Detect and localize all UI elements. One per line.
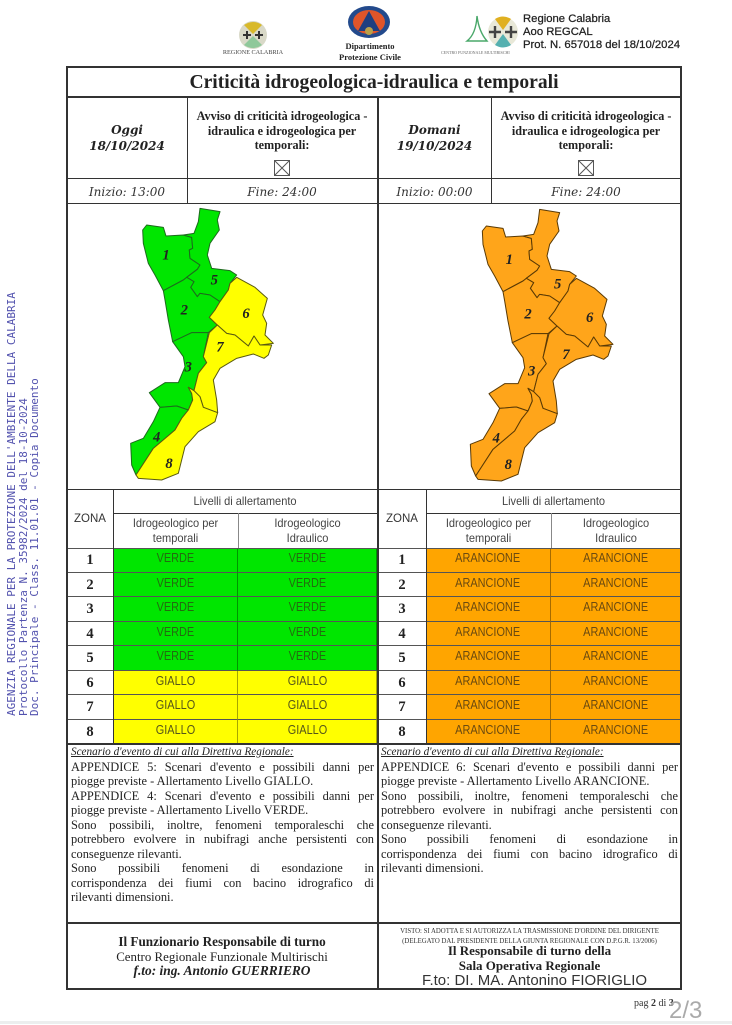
today date: 18/10/2024 — [89, 139, 165, 153]
tomorrow zone rows: ARANCIONE — [456, 673, 520, 688]
today zone rows: 7 — [86, 699, 94, 715]
column heading: temporali: temporali — [153, 530, 198, 544]
text block: tomorrow scenario: conseguenze rilevanti. — [381, 818, 492, 832]
map: tomorrow zones: 7 — [562, 347, 570, 363]
tomorrow zone rows: 7 — [398, 699, 406, 715]
protocol text — [522, 13, 680, 51]
column heading: temporali: Idrogeologico per — [133, 516, 218, 530]
today zone rows: 1 — [86, 552, 94, 568]
tomorrow zone rows: ARANCIONE — [456, 697, 520, 712]
zona heading: ZONA — [386, 512, 418, 524]
today zone rows: VERDE — [288, 599, 326, 614]
signature: operations room: (DELEGATO DAL PRESIDENTE DELLA GIUNTA REGIONALE CON D.P.G.R. 13/2006) — [402, 938, 657, 944]
map: today zones: 1 — [162, 247, 170, 263]
text block: today scenario: APPENDICE 5: Scenari d'evento e possibili danni per — [71, 760, 374, 774]
side stamp: vertical protocol text: AGENZIA REGIONALE PER LA PROTEZIONE DELL'AMBIENTE DELLA CALABRIA — [5, 292, 18, 716]
map: tomorrow zones: 3 — [527, 363, 535, 379]
text block: today scenario: corrispondenza dei fiumi con bacino idrografico di — [71, 876, 374, 890]
text block: today scenario: potrebbero evolvere in nubifragi anche persistenti con — [71, 832, 374, 846]
text block: tomorrow scenario: Scenario d'evento di cui alla Direttiva Regionale: — [381, 746, 604, 758]
signature: operations room — [400, 928, 659, 989]
today start time: Inizio: 13:00 — [89, 184, 165, 198]
column heading: idraulico: Idraulico — [287, 530, 328, 544]
tomorrow date — [397, 123, 472, 153]
column heading: idraulico: Idraulico — [595, 530, 637, 544]
today zone rows: VERDE — [288, 624, 326, 639]
tomorrow zone rows: ARANCIONE — [583, 648, 648, 663]
tomorrow zone rows — [379, 549, 680, 743]
tomorrow zone rows: ARANCIONE — [456, 575, 520, 590]
logo: ARPACAL: CENTRO FUNZIONALE MULTIRISCHI — [441, 50, 510, 55]
tomorrow zone rows: ARANCIONE — [583, 599, 648, 614]
main bulletin table — [66, 66, 682, 990]
header: logos and protocol — [223, 6, 680, 62]
tomorrow zone rows: ARANCIONE — [456, 648, 520, 663]
text block: tomorrow scenario: Sono possibili fenomeni di esondazione in — [381, 832, 678, 846]
today zone rows: VERDE — [156, 599, 194, 614]
column heading: temporali: temporali — [466, 530, 511, 544]
logo: Regione Calabria — [223, 21, 283, 56]
today zone rows: VERDE — [156, 575, 194, 590]
signature: operations room: F.to: DI. MA. Antonino FIORIGLIO — [422, 972, 647, 989]
today notice: idraulica e idrogeologica per — [208, 124, 356, 138]
page indicator overlay: 2/3 — [669, 997, 702, 1024]
tomorrow zone rows: ARANCIONE — [583, 673, 648, 688]
today zone rows: GIALLO — [287, 722, 327, 736]
panel: tomorrow header — [396, 109, 671, 198]
tomorrow zone rows: ARANCIONE — [583, 697, 648, 712]
column heading: temporali: Idrogeologico per — [446, 516, 531, 530]
tomorrow zone rows: ARANCIONE — [583, 624, 648, 639]
panel: today header — [88, 109, 367, 198]
text block: today scenario: conseguenze rilevanti. — [71, 847, 182, 861]
side stamp: vertical protocol text: Doc. Principale - Class. 11.01.01 - Copia Documento — [28, 378, 41, 716]
today zone rows: VERDE — [288, 648, 326, 663]
map: tomorrow zones: 6 — [586, 310, 594, 326]
tomorrow notice — [500, 109, 671, 152]
today zone rows: GIALLO — [155, 697, 195, 712]
tomorrow zone rows: ARANCIONE — [583, 722, 648, 736]
today zone rows: GIALLO — [287, 697, 327, 712]
text block: today scenario: rilevanti dimensioni. — [71, 890, 174, 904]
today zone rows: 8 — [86, 724, 94, 740]
map: today zones: 4 — [152, 429, 160, 445]
tomorrow zone rows: 1 — [398, 552, 406, 568]
text block: tomorrow scenario: piogge previste - Allertamento Livello ARANCIONE. — [381, 774, 649, 788]
text block: tomorrow scenario: potrebbero evolvere in nubifragi anche persistenti con — [381, 803, 678, 817]
tomorrow notice: idraulica e idrogeologica per — [512, 124, 660, 138]
side stamp: vertical protocol text: Protocollo Partenza N. 35982/2024 del 18-10-2024 — [17, 398, 30, 716]
map: tomorrow zones: 5 — [554, 277, 561, 293]
tomorrow zone rows: ARANCIONE — [456, 722, 520, 736]
signature: functionary — [116, 934, 328, 978]
column heading: idraulico — [274, 516, 341, 544]
tomorrow zone rows: ARANCIONE — [583, 575, 648, 590]
text block: tomorrow scenario: APPENDICE 6: Scenari d'evento e possibili danni per — [381, 760, 678, 774]
map: tomorrow zones: 2 — [523, 307, 532, 323]
today zone rows: 3 — [86, 601, 94, 617]
map: today zones: 7 — [216, 339, 224, 355]
text block: tomorrow scenario — [381, 746, 678, 875]
today zone rows — [68, 549, 377, 743]
text block: today scenario: Sono possibili, inoltre, fenomeni temporaleschi che — [71, 818, 374, 832]
tomorrow zone rows: ARANCIONE — [456, 550, 520, 565]
tomorrow zone rows: ARANCIONE — [456, 599, 520, 614]
table: tomorrow alert levels — [379, 494, 680, 743]
icon: tomorrow crossed box — [578, 160, 594, 176]
signature: functionary: f.to: ing. Antonio GUERRIERO — [134, 963, 310, 978]
text block: today scenario — [71, 746, 374, 904]
column heading: temporali — [446, 516, 531, 544]
logo: Dipartimento Protezione Civile: Protezione Civile — [339, 52, 401, 62]
today zone rows: VERDE — [156, 624, 194, 639]
signature: operations room: Il Responsabile di turno della — [448, 943, 611, 958]
icon: today crossed box — [274, 160, 290, 176]
protocol text: Aoo REGCAL — [523, 26, 593, 38]
map: tomorrow zones: 4 — [492, 431, 500, 447]
map: today zones: 3 — [184, 359, 192, 375]
column heading: idraulico: Idrogeologico — [583, 516, 649, 530]
map: today zones: 2 — [180, 303, 188, 319]
logo: Dipartimento Protezione Civile — [339, 6, 401, 62]
today zone rows: VERDE — [156, 648, 194, 663]
today zone rows: VERDE — [288, 550, 326, 565]
tomorrow date: 19/10/2024 — [397, 139, 472, 153]
logo: Regione Calabria: REGIONE CALABRIA — [223, 49, 283, 56]
column heading: temporali — [133, 516, 218, 544]
today notice — [196, 109, 367, 152]
signature: operations room: Sala Operativa Regionale — [459, 958, 600, 973]
today zone rows: GIALLO — [287, 673, 327, 688]
tomorrow start time: Inizio: 00:00 — [396, 184, 473, 198]
levels heading: Livelli di allertamento — [193, 494, 297, 508]
levels heading: Livelli di allertamento — [502, 494, 605, 508]
tomorrow notice: temporali: — [559, 138, 613, 152]
text block: tomorrow scenario: Sono possibili, inoltre, fenomeni temporaleschi che — [381, 789, 678, 803]
protocol text: Regione Calabria — [523, 13, 610, 25]
text block: today scenario: Scenario d'evento di cui alla Direttiva Regionale: — [71, 746, 294, 758]
tomorrow zone rows: 6 — [398, 675, 406, 691]
tomorrow zone rows: ARANCIONE — [456, 624, 520, 639]
today zone rows: GIALLO — [155, 673, 195, 688]
today end time: Fine: 24:00 — [247, 184, 317, 198]
text block: today scenario: APPENDICE 4: Scenari d'evento e possibili danni per — [71, 789, 374, 803]
signature: operations room: VISTO: SI ADOTTA E SI AUTORIZZA LA TRASMISSIONE D'ORDINE DEL DIRIGENTE — [400, 928, 659, 935]
tomorrow zone rows: 4 — [398, 626, 406, 642]
logo: Dipartimento Protezione Civile: Dipartimento — [345, 41, 395, 51]
today zone rows: GIALLO — [155, 722, 195, 736]
tomorrow zone rows: 8 — [398, 724, 406, 740]
text block: today scenario: piogge previste - Allertamento Livello GIALLO. — [71, 774, 313, 788]
map: tomorrow zones: 1 — [506, 252, 513, 268]
today notice: Avviso di criticità idrogeologica - — [197, 109, 367, 123]
column heading: idraulico: Idrogeologico — [274, 516, 341, 530]
map: today zones: 8 — [165, 456, 173, 472]
tomorrow notice: Avviso di criticità idrogeologica - — [501, 109, 671, 123]
today date — [89, 123, 165, 153]
map: tomorrow zones: 8 — [505, 457, 513, 473]
text block: tomorrow scenario: rilevanti dimensioni. — [381, 861, 484, 875]
signature: functionary: Centro Regionale Funzionale Multirischi — [116, 950, 328, 964]
side stamp: vertical protocol text — [5, 292, 41, 716]
tomorrow zone rows: 2 — [398, 577, 406, 593]
page number: pag 2 di 3 — [634, 998, 674, 1009]
map: today zones: 6 — [242, 306, 250, 322]
signature: functionary: Il Funzionario Responsabile di turno — [118, 934, 326, 949]
map: today zones: 5 — [211, 273, 218, 289]
tomorrow zone rows: ARANCIONE — [583, 550, 648, 565]
tomorrow zone rows: 5 — [398, 650, 406, 666]
text block: today scenario: Sono possibili fenomeni di esondazione in — [71, 861, 374, 875]
protocol text: Prot. N. 657018 del 18/10/2024 — [523, 39, 680, 51]
tomorrow date: Domani — [408, 123, 461, 137]
tomorrow zone rows: 3 — [398, 601, 406, 617]
today zone rows: 6 — [86, 675, 94, 691]
map: tomorrow zones — [470, 208, 614, 482]
today zone rows: 2 — [86, 577, 94, 593]
today zone rows: VERDE — [156, 550, 194, 565]
today zone rows: 5 — [86, 650, 94, 666]
today date: Oggi — [111, 123, 143, 137]
today zone rows: VERDE — [288, 575, 326, 590]
text block: today scenario: piogge previste - Allertamento Livello VERDE. — [71, 803, 308, 817]
bottom grey bar — [0, 1021, 732, 1024]
tomorrow end time: Fine: 24:00 — [551, 184, 621, 198]
column heading: idraulico — [583, 516, 649, 544]
table: today alert levels — [68, 494, 377, 743]
text block: tomorrow scenario: corrispondenza dei fiumi con bacino idrografico di — [381, 847, 678, 861]
logo: ARPACAL — [441, 16, 518, 55]
title: Criticità idrogeologica-idraulica e temporali — [189, 72, 559, 93]
today zone rows: 4 — [86, 626, 94, 642]
today notice: temporali: — [255, 138, 309, 152]
map: today zones — [130, 208, 274, 480]
zona heading: ZONA — [74, 512, 106, 524]
